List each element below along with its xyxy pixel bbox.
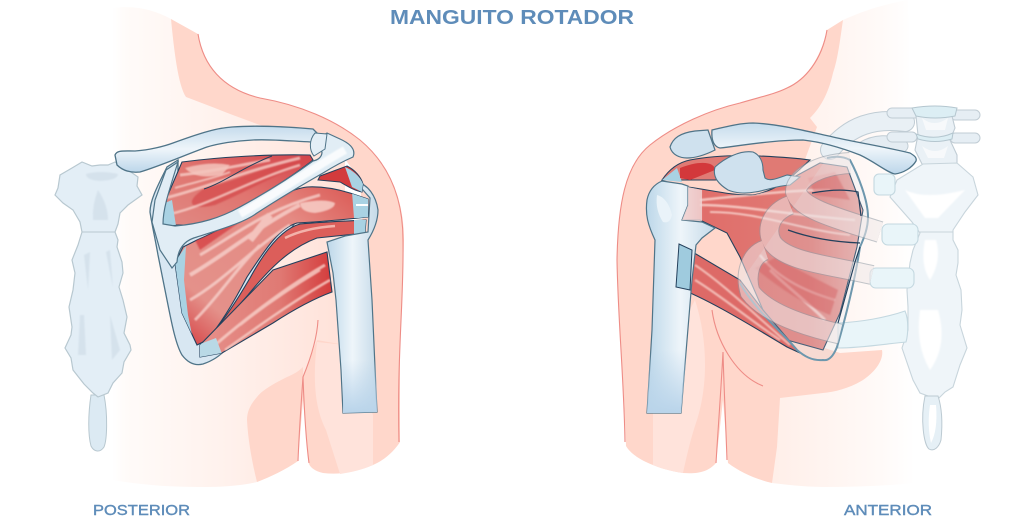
- title: MANGUITO ROTADOR: [390, 7, 635, 29]
- muscle: supraspinatus: [160, 155, 313, 226]
- muscle: teres major: [200, 252, 332, 358]
- muscle: supraspinatus, front: [662, 156, 810, 185]
- muscle: subscapularis: [682, 163, 863, 350]
- icon: scapular spine and acromion: [152, 133, 354, 268]
- icon: scapula, rear view: [150, 160, 300, 365]
- icon: humerus, rear view: [327, 182, 378, 413]
- muscle: small top muscle: [318, 166, 363, 192]
- body skin fade: [772, 0, 915, 487]
- icon: translucent ribs over scapula: [748, 163, 880, 334]
- muscle tendon slits: [788, 190, 861, 323]
- sternum: [890, 163, 978, 400]
- panel: anterior view: [617, 0, 978, 487]
- icon: ribs, cartilage and sternum: [830, 106, 978, 450]
- body skin fade: [113, 7, 345, 487]
- arm lighter highlight: [315, 342, 373, 474]
- skin contour lines: [617, 30, 827, 463]
- arm lighter highlight: [653, 300, 705, 473]
- icon: clavicle and acromion, front: [670, 123, 916, 174]
- pink arm: [303, 330, 400, 474]
- skin contour lines: [198, 34, 403, 463]
- pink shoulder band: [171, 19, 404, 442]
- icon: clavicle, rear view: [115, 126, 327, 172]
- tendon: subscapularis attachment: [682, 187, 702, 221]
- label: anterior: ANTERIOR: [844, 502, 932, 519]
- tendon: teres major attachment: [676, 244, 692, 290]
- muscle: infraspinatus: [175, 187, 370, 345]
- pink body and arm: [617, 20, 882, 483]
- panel: posterior view: [55, 7, 404, 487]
- icon: humerus, front: [646, 181, 715, 413]
- muscle: teres major, front: [691, 253, 800, 354]
- muscle: teres minor: [205, 220, 366, 342]
- pink back fold: [247, 367, 303, 482]
- icon: sternum and spine, rear view: [55, 162, 142, 451]
- icon: coracoid process: [714, 152, 800, 193]
- label: posterior: POSTERIOR: [93, 502, 190, 519]
- rib cartilages: [838, 174, 918, 348]
- upper ribs and vertebrae: [830, 113, 975, 150]
- icon: scapula, front (translucent): [740, 157, 868, 360]
